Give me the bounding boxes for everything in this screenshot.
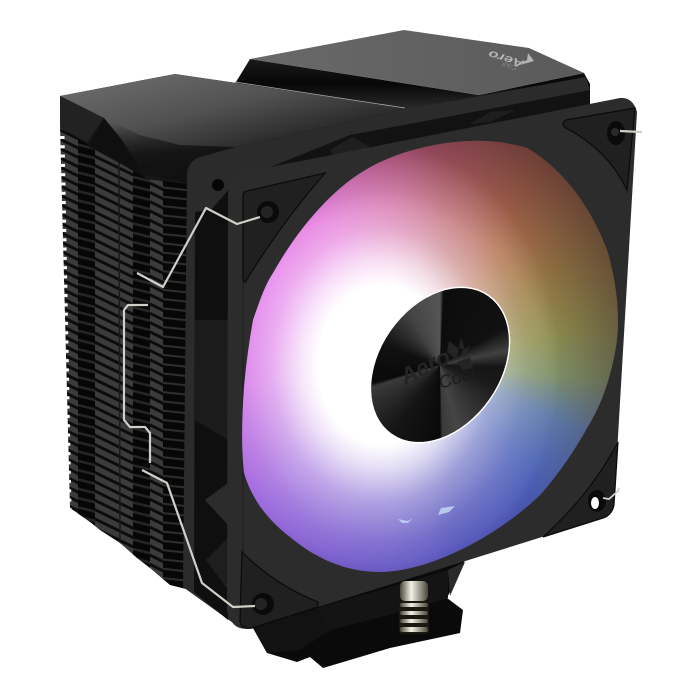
top plate logo: Cool	[501, 60, 518, 71]
top plate logo	[487, 47, 534, 71]
top plate logo: Aero	[487, 47, 527, 70]
corner recess: top right	[563, 108, 635, 190]
front fan frame	[227, 98, 637, 629]
screw: top right	[607, 121, 625, 145]
wire clip: lower	[142, 470, 255, 607]
spring screw	[399, 581, 429, 634]
wire clip: bottom right	[603, 488, 619, 499]
front top plate	[60, 74, 407, 184]
rear top plate	[215, 30, 590, 160]
screw: bottom right	[588, 490, 606, 512]
corner recess: bottom right	[543, 442, 618, 537]
screw: bottom left	[252, 593, 274, 615]
rear fan frame	[183, 77, 600, 628]
hub logo	[395, 337, 478, 393]
wire clip: upper	[137, 208, 260, 287]
illustration: CPU air cooler	[60, 30, 642, 668]
fan blades with RGB glow	[242, 140, 618, 572]
cooler body: heatsink, top plates and fan frames	[60, 30, 637, 668]
hub logo: Aero	[395, 343, 454, 390]
heatsink fin stack	[58, 120, 190, 600]
cooler base and mounting bracket	[183, 560, 465, 668]
wire clip: middle	[124, 305, 150, 463]
corner recess: bottom left	[240, 552, 318, 628]
corner recess: top left	[243, 173, 325, 282]
fan hub disc	[343, 262, 537, 468]
screw: top left	[257, 201, 279, 223]
fan blade glints	[398, 506, 455, 523]
hub logo: Cool	[436, 362, 478, 393]
wire clip: top right	[620, 131, 642, 132]
